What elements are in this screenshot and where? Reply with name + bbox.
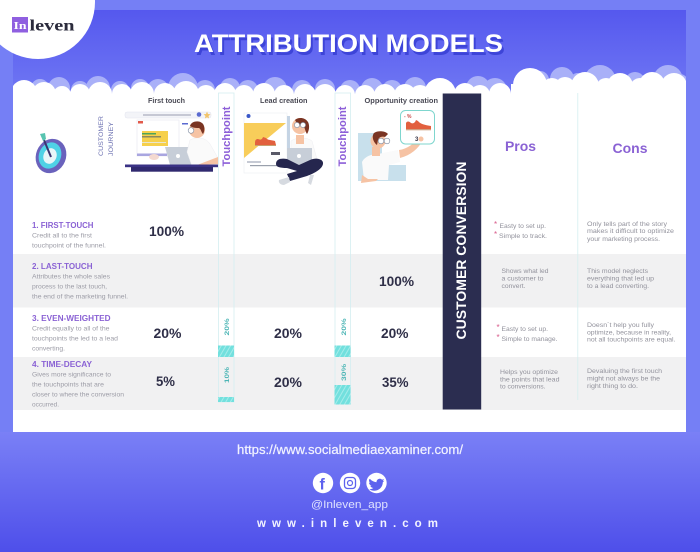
illustration: opportunity creation [358,110,434,183]
touchpoint columns: Touchpoint [337,106,349,166]
row 3: even-weighted: not all touchpoints are equal. [587,336,676,344]
row 2: last-touch: to a lead converting. [587,283,649,290]
row 1: first-touch: Credit all to the first [32,232,92,240]
white table panel [13,94,686,432]
row 4: time-decay: the touchpoints that are [32,382,104,388]
row 4: time-decay: occurred. [32,402,59,408]
title: ATTRIBUTION MODELS [194,30,503,58]
row 1: first-touch: 100% [149,223,185,239]
cloud edge [13,65,686,94]
row 1: first-touch: 1. FIRST-TOUCH [32,221,94,230]
logo badge: leven [30,18,75,34]
row 2: last-touch: 2. LAST-TOUCH [32,262,93,271]
title: ATTRIBUTION MODELS [196,33,505,61]
touchpoint columns: Touchpoint [221,106,233,166]
row 4: time-decay: right thing to do. [587,383,638,390]
row 4: time-decay: Gives more significance to [32,372,111,378]
row 4: time-decay: to conversions. [500,384,546,390]
row 3: even-weighted: touchpoints the led to a lead [32,336,118,342]
row 2: last-touch: a customer to [502,276,544,282]
touchpoint columns: 30% [341,364,348,381]
column headers: Opportunity creation [364,96,438,105]
source url: https://www.socialmediaexaminer.com/ [237,443,464,457]
row 3: even-weighted: optimize, because in reality, [587,330,671,336]
row 4: time-decay: 35% [382,374,409,390]
row 1: first-touch [32,220,674,250]
row 4: time-decay: the points that lead [500,376,560,384]
row 3: even-weighted: * [496,333,500,342]
row 1: first-touch: touchpoint of the funnel. [32,242,106,250]
social icons [313,473,387,494]
row 4: time-decay: 5% [156,373,176,389]
logo badge [0,0,95,59]
row 3: even-weighted: converting. [32,346,65,352]
social handle: @Inleven_app [311,499,388,511]
row 3: even-weighted: Credit equally to all of the [32,326,110,332]
row 4: time-decay: closer to where the conversion [32,392,124,398]
touchpoint columns: 20% [341,318,348,336]
row 1: first-touch: * [494,230,497,239]
row 1: first-touch: Only tells part of the story [587,221,668,228]
row 2: last-touch: process to the last touch, [32,284,107,290]
row 3: even-weighted [32,314,676,352]
row 2: last-touch: 100% [379,273,415,289]
row 4: time-decay: might not always be the [587,376,660,382]
customer journey label: CUSTOMER [98,116,105,156]
column headers: First touch [148,96,185,105]
social icons: f [320,476,326,494]
row 3: even-weighted: Easty to set up. [502,326,548,333]
row 2: last-touch [32,262,654,300]
row 2: last-touch: the end of the marketing funnel. [32,294,128,300]
website: www.inleven.com [256,518,438,530]
row 4: time-decay: 20% [274,374,303,390]
row 4: time-decay [32,360,662,408]
touchpoint columns: 10% [224,367,231,383]
row 4: time-decay: 4. TIME-DECAY [32,360,93,369]
customer conversion bar [443,94,481,410]
illustration: opportunity creation: 3 [415,137,419,143]
row 2: last-touch: convert. [502,283,526,290]
customer conversion bar: CUSTOMER CONVERSION [453,162,469,340]
row 1: first-touch: Easty to set up. [500,223,546,230]
illustration: opportunity creation: - % [404,114,412,120]
row 3: even-weighted: 20% [274,325,303,341]
touchpoint columns: 20% [224,318,231,336]
customer journey label [98,116,115,156]
row 3: even-weighted: 20% [154,325,182,341]
row 2: last-touch: Shows what led [502,268,549,275]
row 2: last-touch: everything that led up [587,276,654,282]
column headers: Lead creation [260,96,308,105]
logo badge: In [14,20,26,32]
row 4: time-decay: Devaluing the first touch [587,368,662,375]
row 3: even-weighted: 3. EVEN-WEIGHTED [32,314,111,323]
column headers [148,96,438,105]
row 1: first-touch: Simple to track. [499,233,547,240]
row 2: last-touch: This model neglects [587,268,649,275]
row 3: even-weighted: Simple to manage. [502,336,558,343]
row 1: first-touch: your marketing process. [587,236,660,243]
row 3: even-weighted: Doesn´t help you fully [587,322,655,329]
icon: target with dart [31,133,71,178]
row 3: even-weighted: 20% [381,325,409,341]
illustration: lead creation [244,113,323,185]
row 2: last-touch: Attributes the whole sales [32,274,110,280]
pros and cons headings: Pros [505,139,536,154]
row 1: first-touch: * [494,220,497,229]
pros and cons headings: Cons [612,141,648,156]
row 3: even-weighted: * [496,323,500,332]
row 4: time-decay: Helps you optimize [500,369,558,376]
row 1: first-touch: makes it difficult to optimize [587,228,674,235]
touchpoint columns [218,93,578,404]
illustration: first touch [125,112,218,172]
pros and cons headings [505,139,648,156]
customer journey label: JOURNEY [108,121,115,156]
